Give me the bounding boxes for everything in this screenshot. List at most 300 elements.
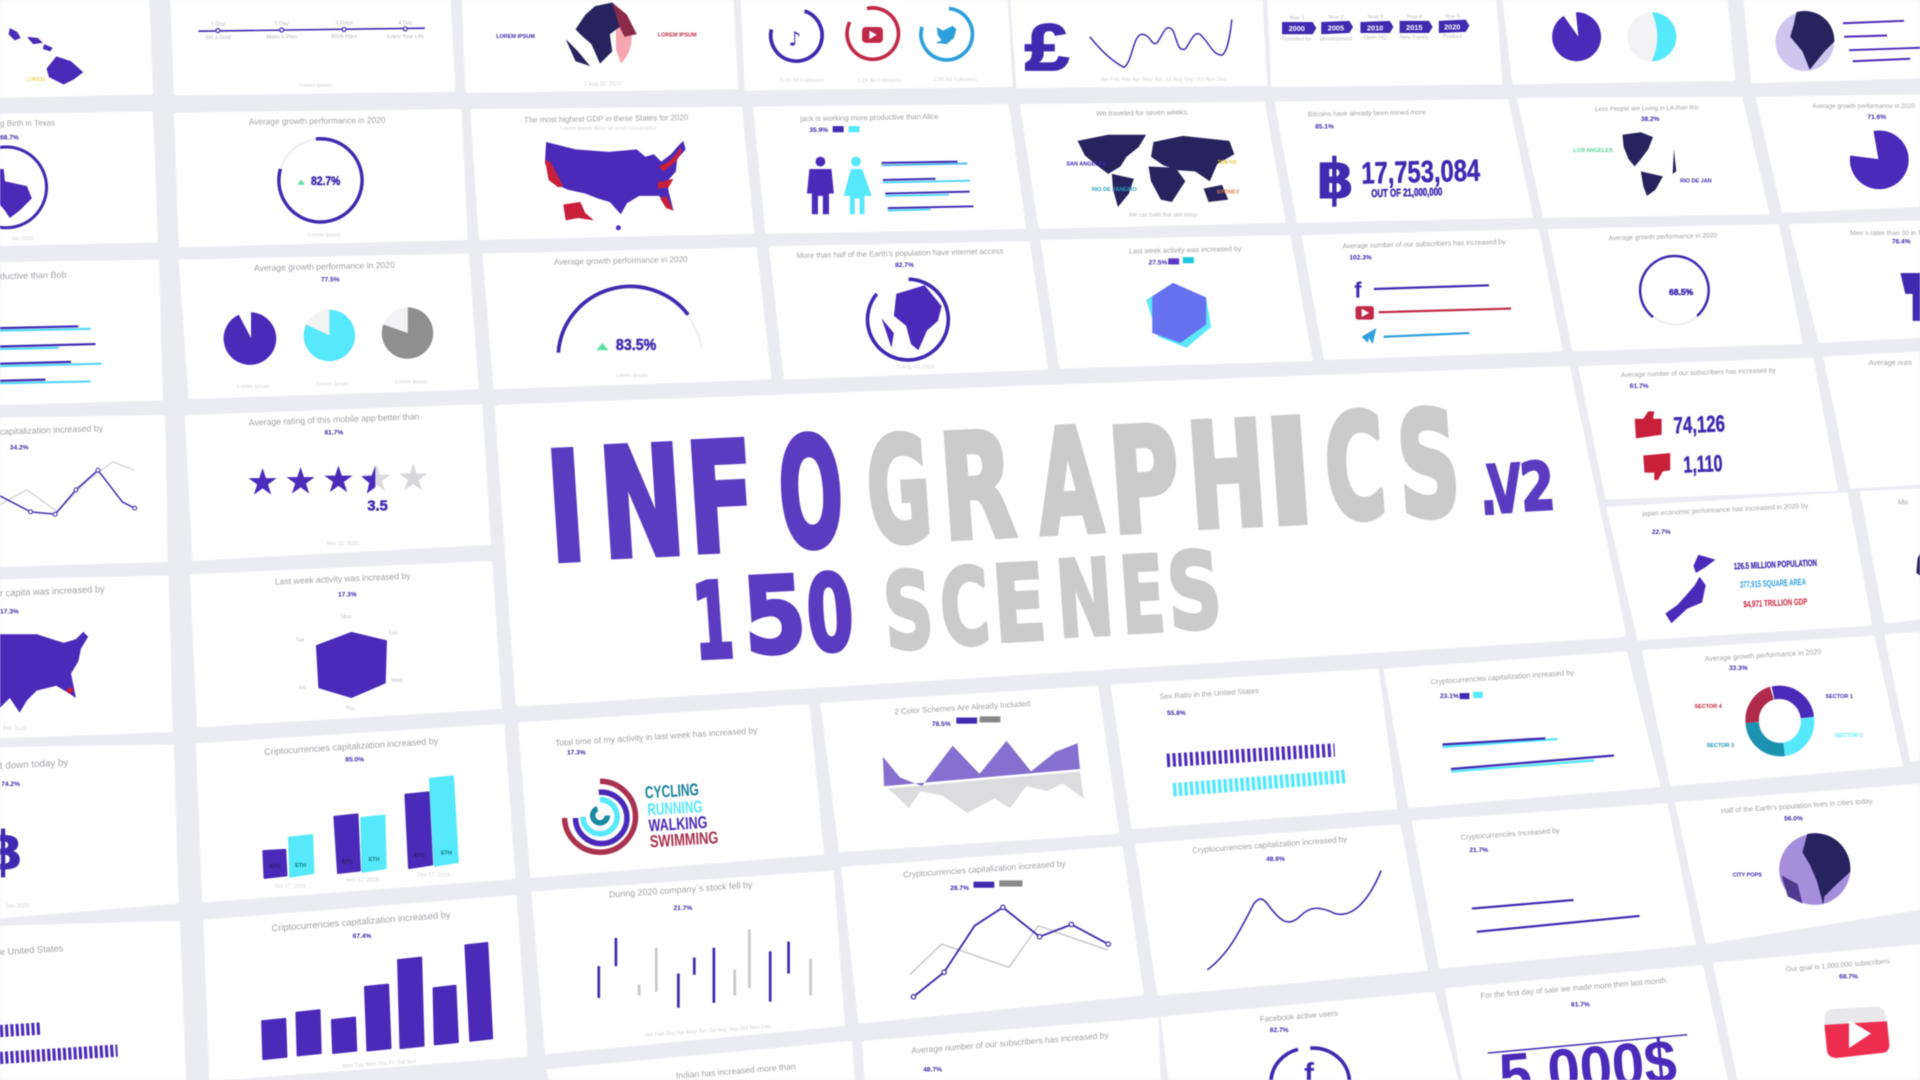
panel: Bitcoin count xyxy=(1276,100,1532,222)
panel: donut xyxy=(1643,637,1902,785)
panel: two thin bars xyxy=(1413,804,1695,967)
panel: pies xyxy=(1504,0,1734,83)
heading: GRAPHICS: P xyxy=(1104,397,1185,568)
points xyxy=(29,468,137,516)
panel: productive than Bob xyxy=(0,261,162,404)
icon: telegram xyxy=(1362,328,1376,344)
panel: Jack vs Alice xyxy=(754,105,1025,233)
caption: We can build that skill today xyxy=(1129,213,1198,219)
legend xyxy=(833,126,860,132)
heading: INFO: I xyxy=(542,419,590,597)
panel: partial right xyxy=(1824,353,1920,487)
gauge arc xyxy=(558,286,702,353)
title: r capita was increased by xyxy=(0,584,105,598)
arrow xyxy=(298,179,305,185)
bar labels: BTC xyxy=(414,853,425,859)
value: 85.0% xyxy=(345,757,364,764)
year labels: Year 5 xyxy=(1444,14,1460,20)
ring and Texas xyxy=(0,147,47,228)
icon: tiktok ring: ♪ xyxy=(789,27,801,50)
title: Facebook active users xyxy=(1260,1009,1338,1024)
captions: Lorem Ipsum xyxy=(237,384,270,390)
line: purple xyxy=(913,907,1108,997)
panel: globe and bars xyxy=(1745,0,1920,82)
panel: subscribers bottom xyxy=(863,1019,1160,1080)
panel: Japan xyxy=(1608,493,1871,639)
value: 17.3% xyxy=(0,608,19,615)
heading: SCENES: C xyxy=(936,545,994,670)
title: Men`s older than 30 in T xyxy=(1850,230,1920,237)
timeline labels: Set a Goal xyxy=(205,35,231,41)
chevrons xyxy=(1282,20,1469,34)
value: 81.7% xyxy=(324,430,343,437)
labels: SECTOR 1 xyxy=(1825,694,1853,700)
title: Criptocurrencies capitalization increased by xyxy=(271,910,451,933)
value: 102.3% xyxy=(1349,255,1372,262)
title: We traveled for seven weeks. xyxy=(1096,108,1189,118)
caption: Lorem Ipsum xyxy=(308,232,341,238)
heading: version xyxy=(1477,447,1558,530)
title: Average number of our subscribers has increased by xyxy=(911,1030,1110,1055)
arrow xyxy=(596,343,609,350)
heading: 150 xyxy=(689,551,858,684)
panel: Indian increase xyxy=(547,1042,853,1080)
value: 56.0% xyxy=(1784,815,1803,822)
captions: New Family xyxy=(1400,35,1429,41)
axis labels: Mon xyxy=(341,614,352,620)
area: purple xyxy=(883,741,1080,786)
value: 68.7% xyxy=(0,135,19,142)
title: Total time of my activity in last week has increased by xyxy=(555,725,758,748)
panel: area chart xyxy=(822,687,1118,851)
caption: Lorem Ipsum xyxy=(616,373,648,379)
captions xyxy=(237,379,428,390)
panel: sales xyxy=(1446,966,1727,1080)
globe xyxy=(566,2,637,66)
bars xyxy=(1442,738,1614,771)
map: USA xyxy=(545,141,686,214)
axis labels: Jan Feb Mar Apr May Jun Jul Aug Sep Oct Nov Dec xyxy=(1100,77,1227,83)
value: 48.7% xyxy=(923,1066,942,1073)
map labels xyxy=(1066,160,1240,195)
date: Dec 2020 xyxy=(3,726,26,732)
value: 34.2% xyxy=(10,444,29,451)
heading: 150: 1 xyxy=(689,559,738,684)
count up: 74,126 xyxy=(1673,410,1726,438)
heading: GRAPHICS: C xyxy=(1319,384,1391,554)
axis labels: Thu xyxy=(345,706,355,712)
value: 81.7% xyxy=(1571,1002,1590,1009)
panel: stock lines xyxy=(533,872,844,1053)
legend xyxy=(1168,257,1194,264)
timeline labels: Make a Plan xyxy=(266,35,297,41)
stat: GDP: $4,971 TRILLION GDP xyxy=(1743,597,1807,609)
value: 67.4% xyxy=(353,933,372,940)
icon: youtube ring xyxy=(847,8,898,59)
map: Hawaii islands xyxy=(9,28,83,84)
title: More than half of the Earth's population have internet access xyxy=(796,247,1004,260)
pie: grey xyxy=(382,307,433,359)
stars filled: ★ xyxy=(246,461,279,504)
icon: man xyxy=(807,157,834,214)
radar cyan xyxy=(1146,283,1211,348)
bars xyxy=(882,162,973,211)
bars xyxy=(1843,21,1920,61)
value: 33.3% xyxy=(1729,665,1748,672)
rings xyxy=(564,781,635,852)
star half: ★ xyxy=(360,457,393,500)
panel: goal xyxy=(1714,945,1920,1080)
title: Last week activity was increased by xyxy=(1129,245,1242,256)
globe xyxy=(1779,833,1850,905)
line: grey xyxy=(910,926,1108,975)
captions: 1.2K All Followers xyxy=(780,78,824,84)
title: Sex Ratio in the United States xyxy=(1159,686,1259,701)
panel: line chart left xyxy=(0,416,167,566)
label: yellow: LOREM xyxy=(26,77,46,83)
area: grey xyxy=(888,771,1084,813)
title: Cryptocurrencies capitalization increased by xyxy=(903,858,1067,880)
label: walking: WALKING xyxy=(648,812,708,835)
panel: older than 30 xyxy=(1790,222,1920,342)
chevron years: 2010 xyxy=(1367,24,1383,33)
bars: purple xyxy=(263,792,432,878)
title: capitalization increased by xyxy=(0,423,104,437)
map: red states xyxy=(545,147,682,220)
caption: Lorem Ipsum xyxy=(300,83,332,89)
purple candles xyxy=(599,938,789,1008)
map: Japan xyxy=(1665,555,1716,623)
axis labels: Tue xyxy=(388,630,398,636)
grey line xyxy=(0,462,135,512)
bar labels: ETH xyxy=(369,857,380,863)
panel: partial right 2 xyxy=(1861,490,1920,622)
value: 76.4% xyxy=(1892,239,1911,246)
donut segments xyxy=(1752,692,1808,750)
labels: RIO DE JAN xyxy=(1680,178,1712,184)
radar blue xyxy=(1152,283,1206,343)
title: During 2020 company`s stock fell by xyxy=(609,880,753,900)
stars filled: ★ xyxy=(322,458,355,501)
title: Mo xyxy=(1898,497,1908,506)
value: 85.1% xyxy=(1315,124,1334,131)
value: 82.7% xyxy=(1270,1027,1289,1034)
label: cycling: CYCLING xyxy=(644,779,699,802)
panel: down today xyxy=(0,746,178,917)
value: 17.3% xyxy=(338,591,357,598)
panel: sex ratio xyxy=(1112,670,1396,828)
map labels: SAN ANGELES xyxy=(1066,161,1106,167)
panel: hexagon xyxy=(191,562,501,726)
globe xyxy=(1776,11,1834,71)
panel: timeline xyxy=(171,0,454,94)
panel: half earth xyxy=(1676,785,1920,943)
ring gauge xyxy=(1640,256,1709,324)
title: Cryptocurrencies Increased by xyxy=(1460,826,1560,842)
panel: Facebook users xyxy=(1162,993,1457,1080)
title: Bitcoins have already been mined more xyxy=(1308,109,1426,118)
dates: Dec 17, 2019 xyxy=(417,873,450,879)
stat: population: 126.5 MILLION POPULATION xyxy=(1734,558,1817,571)
timeline labels: 3 Days xyxy=(336,20,353,26)
chevron years: 2015 xyxy=(1406,23,1422,32)
label left: LOREM IPSUM xyxy=(496,34,535,40)
value: 77.5% xyxy=(321,277,340,284)
captions: Lorem Ipsum xyxy=(395,379,428,385)
value: 71.6% xyxy=(1867,114,1886,121)
title: Criptocurrencies capitalization increased by xyxy=(264,736,439,757)
icon: woman xyxy=(844,157,872,214)
legend xyxy=(956,716,1000,724)
title: Average growth performance in 2020 xyxy=(249,115,386,127)
labels xyxy=(1573,148,1712,184)
panel: thumbs xyxy=(1580,359,1837,498)
panel: Hawaii map xyxy=(0,0,152,97)
timeline labels: Work Hard xyxy=(331,34,357,40)
heading: INFO xyxy=(542,405,848,597)
year labels: Year 3 xyxy=(1367,14,1383,20)
map labels: TOKYO xyxy=(1217,160,1237,166)
captions: 1.9K All Followers xyxy=(933,77,977,83)
panel: grouped bars xyxy=(197,725,514,901)
heading: SCENES: E xyxy=(989,541,1050,667)
title: Cryptocurrencies capitalization increased by xyxy=(1192,835,1347,855)
heading: GRAPHICS xyxy=(861,381,1465,577)
panel: chevrons timeline xyxy=(1269,0,1501,86)
globe land xyxy=(882,285,942,350)
panel: tall bars xyxy=(204,896,527,1080)
rating: 3.5 xyxy=(367,499,388,515)
chevron years: 2000 xyxy=(1289,24,1305,33)
line xyxy=(1488,1035,1687,1053)
icon: bitcoin sign: ฿ xyxy=(1316,147,1354,212)
captions: Lorem Ipsum xyxy=(317,382,350,388)
panel: Earth internet xyxy=(770,242,1047,378)
title: For the first day of sale we made more then last month xyxy=(1480,976,1666,1000)
axis labels: Jan Feb Mar Apr May Jun Jul Aug Sep Oct Nov Dec xyxy=(644,1024,771,1039)
heading: SCENES: S xyxy=(880,549,937,674)
panel: central title xyxy=(499,370,1622,702)
value: 83.5% xyxy=(616,337,656,354)
captions xyxy=(1282,34,1462,42)
axis labels: Mon Tue Wed Thu Fri Sat Sun xyxy=(342,1059,417,1070)
heading: INFO: O xyxy=(773,405,848,583)
heading: 150: 5 xyxy=(739,553,810,679)
value: 82.7% xyxy=(311,174,341,188)
panel: GDP map xyxy=(471,108,753,239)
bars: cyan xyxy=(289,776,458,877)
sub number: OUT OF 21,000,000 xyxy=(1371,186,1443,200)
timeline labels: Enjoy Your Life xyxy=(387,34,424,40)
star empty: ★ xyxy=(397,456,430,499)
panel: LA vs Rio xyxy=(1518,98,1768,217)
captions: 1.1K All Followers xyxy=(857,78,901,84)
panel: single curve xyxy=(1136,825,1427,994)
dates xyxy=(274,873,450,890)
title: Our goal is 1,000,000 subscribers xyxy=(1786,958,1891,973)
panel: partial right 3 xyxy=(1886,633,1920,760)
ring xyxy=(868,279,948,360)
curve xyxy=(1207,871,1381,970)
title: ductive than Bob xyxy=(0,270,67,281)
year labels xyxy=(1289,14,1460,22)
map labels: SYDNEY xyxy=(1217,189,1240,195)
bar labels: ETH xyxy=(295,863,306,869)
purple line xyxy=(0,470,135,514)
pie: cyan xyxy=(1627,12,1676,61)
title: Average growth performance in 2020 xyxy=(1608,232,1718,242)
bar labels: BTC xyxy=(269,864,281,870)
ring gauge xyxy=(279,139,362,222)
value: 74.2% xyxy=(1,781,20,788)
title: Cryptocurrencies capitalization increased by xyxy=(1430,668,1574,686)
panel: subscribers xyxy=(1303,230,1561,359)
bar labels xyxy=(269,851,452,870)
panel: world map xyxy=(1021,103,1284,228)
bar labels: ETH xyxy=(441,851,452,857)
panel: social icons xyxy=(742,0,1011,89)
year labels: Year 2 xyxy=(1328,15,1344,21)
title: Average growth performance in 2020 xyxy=(1705,648,1822,663)
chevron years: 2005 xyxy=(1328,24,1344,33)
stars filled: ★ xyxy=(284,459,317,502)
icon: tiktok ring xyxy=(771,11,822,61)
timeline labels: 4 Day xyxy=(398,20,413,26)
bars xyxy=(0,326,102,383)
heading: SCENES: E xyxy=(1116,533,1169,658)
captions: Development xyxy=(1320,36,1353,42)
map: Americas xyxy=(1622,132,1676,196)
label right: LOREM IPSUM xyxy=(658,33,697,39)
panel: globe split xyxy=(463,0,737,92)
panel: three pies xyxy=(180,255,478,398)
labels: LOS ANGELES xyxy=(1573,148,1613,154)
ring xyxy=(1271,1048,1349,1080)
title: Less People are Living in LA than Rio xyxy=(1595,104,1699,113)
year labels: Year 4 xyxy=(1406,14,1422,20)
big number: 17,753,084 xyxy=(1361,154,1481,191)
labels: SECTOR 2 xyxy=(1835,733,1863,739)
map: Hawaii dot xyxy=(616,225,621,230)
axis labels: Fri xyxy=(299,685,306,691)
icon: twitter ring xyxy=(921,9,972,60)
value: 68.5% xyxy=(1669,287,1694,297)
label: swimming: SWIMMING xyxy=(649,827,719,851)
panel: radar xyxy=(1042,236,1311,367)
hexagon xyxy=(316,632,387,698)
heading: GRAPHICS: G xyxy=(861,407,937,577)
value: 55.8% xyxy=(1167,710,1186,717)
people row: purple xyxy=(1167,750,1335,760)
icon: youtube xyxy=(1824,1007,1889,1058)
panel: ring 68.5 xyxy=(1549,225,1801,350)
pie: purple xyxy=(1552,12,1601,61)
marker xyxy=(67,688,73,694)
value: 22.7% xyxy=(1652,529,1671,536)
line chart xyxy=(1090,20,1232,67)
caption: Lorem ipsum dolor sit amet consectetur xyxy=(560,126,657,132)
panel: pound chart xyxy=(1011,0,1266,87)
labels xyxy=(1694,694,1863,749)
bar: telegram xyxy=(1384,333,1469,337)
value: 35.9% xyxy=(809,127,828,134)
captions xyxy=(780,77,977,84)
heading: GRAPHICS: A xyxy=(1032,398,1107,569)
title: t down today by xyxy=(0,757,69,772)
panel: double bars xyxy=(1385,653,1659,807)
value: 21.7% xyxy=(1469,847,1488,854)
title: Average number of our subscribers has increased by xyxy=(1621,367,1777,379)
heading: INFO: N xyxy=(595,413,689,593)
heading: GRAPHICS: R xyxy=(935,402,1020,574)
captions: Product xyxy=(1443,34,1462,40)
bar labels: BTC xyxy=(342,859,353,865)
panel: Texas xyxy=(0,113,157,245)
axis labels: Wed xyxy=(391,678,402,684)
bar: youtube xyxy=(1379,309,1511,312)
timeline labels: 1 Day xyxy=(274,21,289,27)
value: 23.1% xyxy=(1440,693,1459,700)
label: running: RUNNING xyxy=(647,796,703,820)
map labels: RIO DE JANEIRO xyxy=(1092,187,1137,193)
dates: Oct 17, 2019 xyxy=(274,884,306,890)
title: Average growth performance in 2020 xyxy=(1812,103,1915,110)
value: 78.5% xyxy=(932,721,951,728)
icon: pound sign: £ xyxy=(1025,11,1069,85)
labels: SECTOR 4 xyxy=(1694,704,1723,710)
heading: GRAPHICS: S xyxy=(1392,381,1465,552)
value: 48.9% xyxy=(1266,856,1285,863)
captions: Founded by xyxy=(1282,36,1312,42)
title: Indian has increased more than xyxy=(675,1061,796,1080)
stat: area: 377,915 SQUARE AREA xyxy=(1740,577,1806,590)
value: 27.5% xyxy=(1149,259,1167,266)
label: CITY POPS xyxy=(1733,873,1762,879)
count down: 1,110 xyxy=(1683,450,1723,478)
title: japan economic performance has increased in 2020 by xyxy=(1641,503,1809,518)
legend xyxy=(973,880,1022,888)
value: 61.7% xyxy=(1630,383,1649,390)
title: Last week activity was increased by xyxy=(275,571,411,587)
heading: version: 2 xyxy=(1517,447,1558,527)
panel: half gauge xyxy=(484,249,770,388)
panel: ring 82.7 xyxy=(175,110,467,246)
panel: two lines xyxy=(842,847,1142,1022)
panel: US people xyxy=(0,922,185,1080)
title: g Birth in Texas xyxy=(0,118,55,128)
map: USA xyxy=(0,632,88,713)
map: world xyxy=(1078,135,1234,207)
date: 1 Aug 10, 2020 xyxy=(897,365,934,371)
icon: youtube xyxy=(1356,306,1374,320)
heading: SCENES: N xyxy=(1052,536,1117,662)
pie xyxy=(1850,130,1909,189)
bars xyxy=(1472,900,1640,932)
value: 21.7% xyxy=(673,905,692,912)
icon: thumbs down xyxy=(1643,453,1670,480)
points xyxy=(911,905,1110,999)
pie: purple xyxy=(224,312,276,365)
title: Average growth performance in 2020 xyxy=(254,260,395,273)
date: Jan 2020 xyxy=(11,236,33,242)
bars xyxy=(262,943,492,1059)
value: 38.2% xyxy=(1641,116,1660,123)
title: Half of the Earth's population lives in cities today. xyxy=(1721,797,1874,815)
title: jack is working more productive than Alice xyxy=(799,112,939,123)
people row: cyan xyxy=(1173,776,1347,790)
pie: cyan xyxy=(304,310,355,361)
chevron years xyxy=(1289,22,1460,33)
